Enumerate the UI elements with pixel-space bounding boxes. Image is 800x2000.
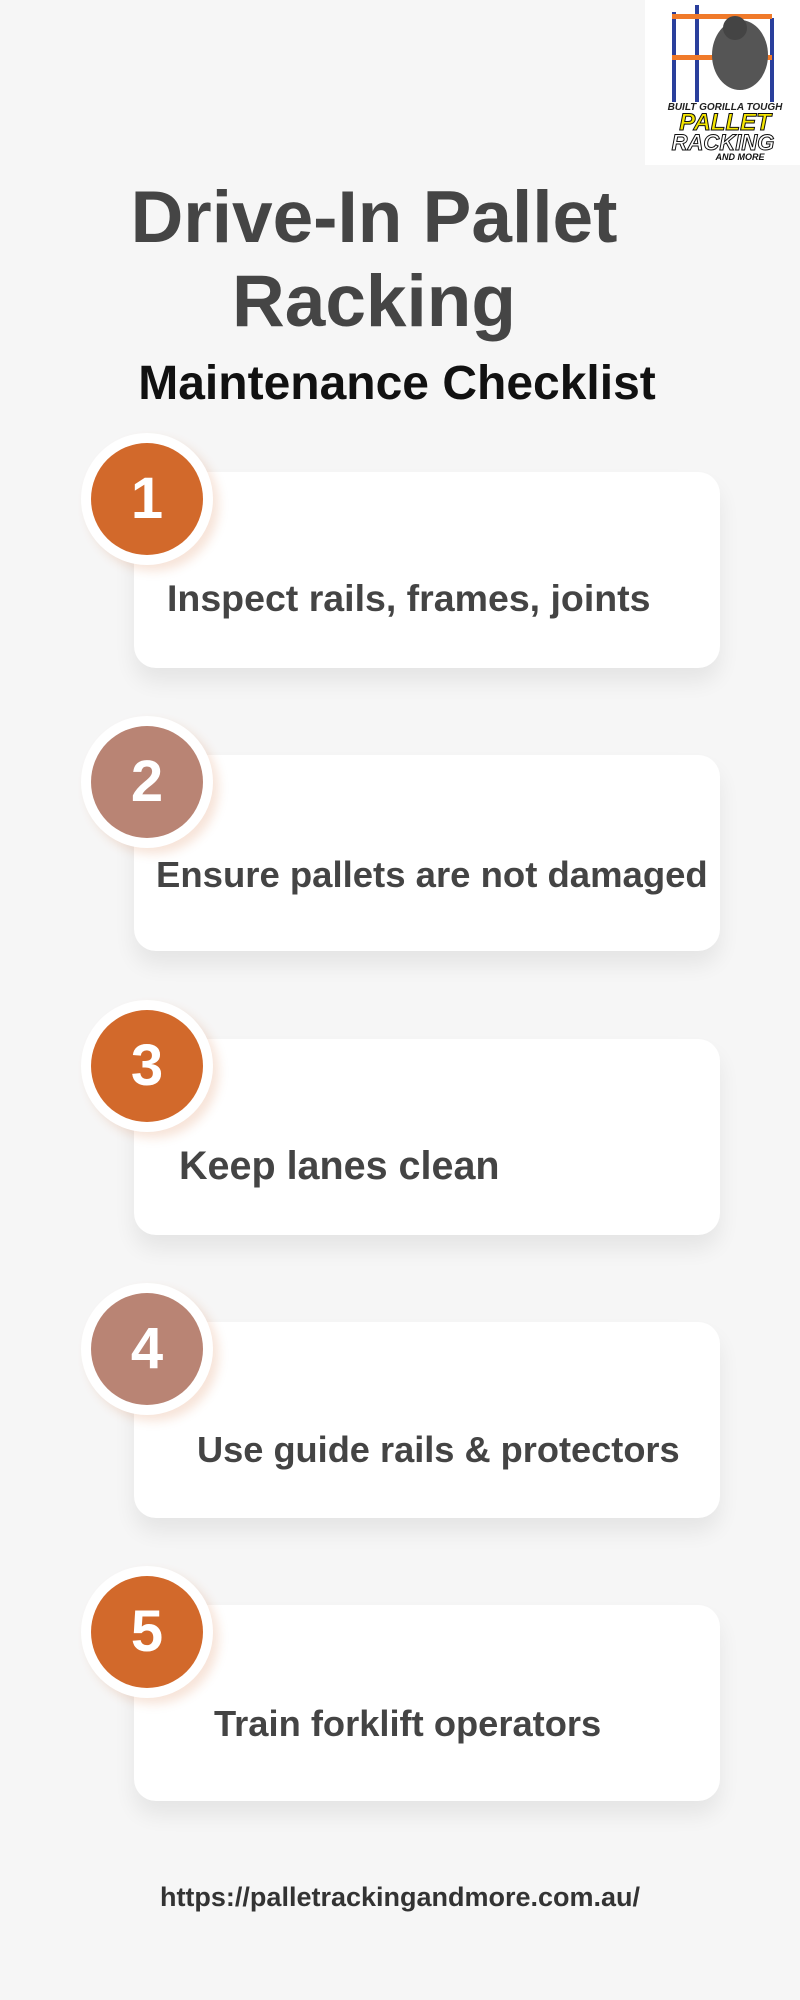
number 5: 5 [131, 1599, 163, 1664]
title [131, 177, 617, 342]
title: Drive-In Pallet [131, 177, 617, 258]
card 2 [134, 755, 720, 951]
number 1 [81, 433, 213, 565]
text 5: Train forklift operators [214, 1703, 601, 1744]
text 4: Use guide rails & protectors [197, 1429, 680, 1470]
card 3 [134, 1039, 720, 1235]
title: Racking [232, 261, 516, 342]
logo text: PALLET [679, 109, 773, 136]
logo text: RACKING [672, 130, 774, 155]
card 1 [134, 472, 720, 668]
subtitle: Maintenance Checklist [138, 357, 656, 410]
number 4 [81, 1283, 213, 1415]
number 4: 4 [131, 1316, 163, 1381]
number 2: 2 [131, 749, 163, 814]
text 3: Keep lanes clean [179, 1144, 500, 1188]
logo text [668, 102, 783, 162]
logo text: AND MORE [714, 152, 765, 162]
footer url: https://palletrackingandmore.com.au/ [160, 1882, 640, 1912]
number 1: 1 [131, 466, 163, 531]
logo text: BUILT GORILLA TOUGH [668, 102, 783, 113]
number 2 [81, 716, 213, 848]
number 5 [81, 1566, 213, 1698]
logo [645, 0, 800, 165]
text 2: Ensure pallets are not damaged [156, 854, 708, 895]
card 5 [134, 1605, 720, 1801]
card 4 [134, 1322, 720, 1518]
icon: racking [672, 5, 774, 102]
number 3: 3 [131, 1033, 163, 1098]
text 1: Inspect rails, frames, joints [167, 577, 651, 619]
number 3 [81, 1000, 213, 1132]
